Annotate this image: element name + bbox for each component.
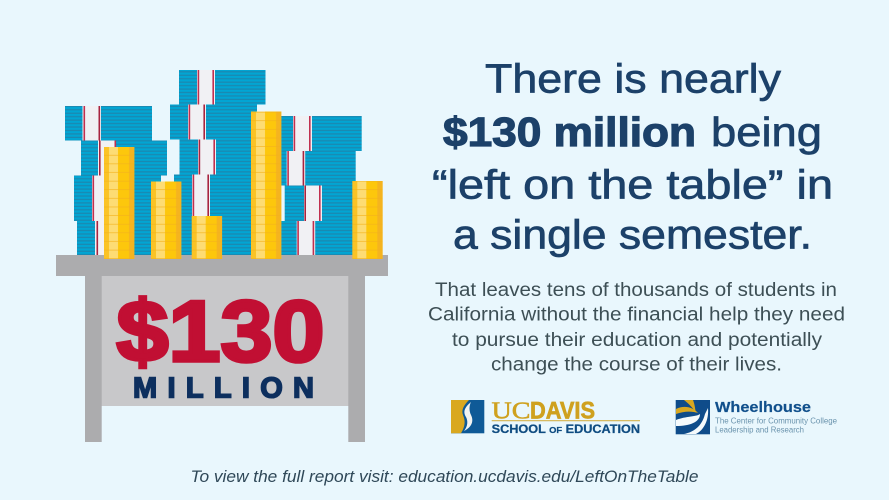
- logo: UC Davis School of Education: DAVIS: [530, 398, 595, 425]
- headline: a single semester.: [453, 211, 812, 257]
- body text: California without the financial help they need: [428, 304, 845, 326]
- coin stack 1: [104, 147, 134, 259]
- footer: report link: To view the full report visit: education.ucdavis.edu/LeftOnTheTable: [190, 468, 698, 486]
- stack of banknotes: centre: [170, 70, 266, 256]
- big amount: $130: $130: [116, 284, 324, 380]
- tagline: The Center for Community College: [715, 416, 837, 426]
- coin stack 5: [352, 181, 383, 259]
- illustration: money on a table: [56, 70, 388, 442]
- label: MILLION: MILLION: [133, 372, 314, 404]
- headline: [432, 56, 833, 257]
- logo: UC Davis School of Education: [451, 398, 640, 436]
- wordmark: UC DAVIS: UC: [492, 399, 530, 425]
- icon: UC Davis flame: [451, 400, 484, 433]
- tagline: Leadership and Research: [715, 424, 804, 434]
- body text: [428, 279, 845, 376]
- icon: Wheelhouse swirl: [676, 400, 710, 434]
- body text: to pursue their education and potentially: [452, 329, 822, 351]
- body text: That leaves tens of thousands of students in: [435, 279, 837, 301]
- tagline: [715, 416, 837, 434]
- stack of banknotes: right: [281, 116, 362, 256]
- coin stack 3: [192, 216, 222, 259]
- headline: There is nearly: [485, 56, 782, 102]
- coin stack 2: [151, 182, 181, 259]
- body text: change the course of their lives.: [491, 354, 782, 376]
- stack of banknotes: left: [65, 106, 167, 256]
- headline: $130 million: [443, 109, 696, 155]
- logo: Wheelhouse: [676, 399, 837, 434]
- headline: “left on the table” in: [432, 161, 833, 207]
- coin stack 4: [251, 112, 281, 259]
- wordmark: Wheelhouse: Wheelhouse: [715, 399, 811, 416]
- table: [56, 255, 388, 442]
- wordmark: School of Education: SCHOOL OF EDUCATION: [492, 424, 640, 436]
- headline: being: [711, 109, 822, 155]
